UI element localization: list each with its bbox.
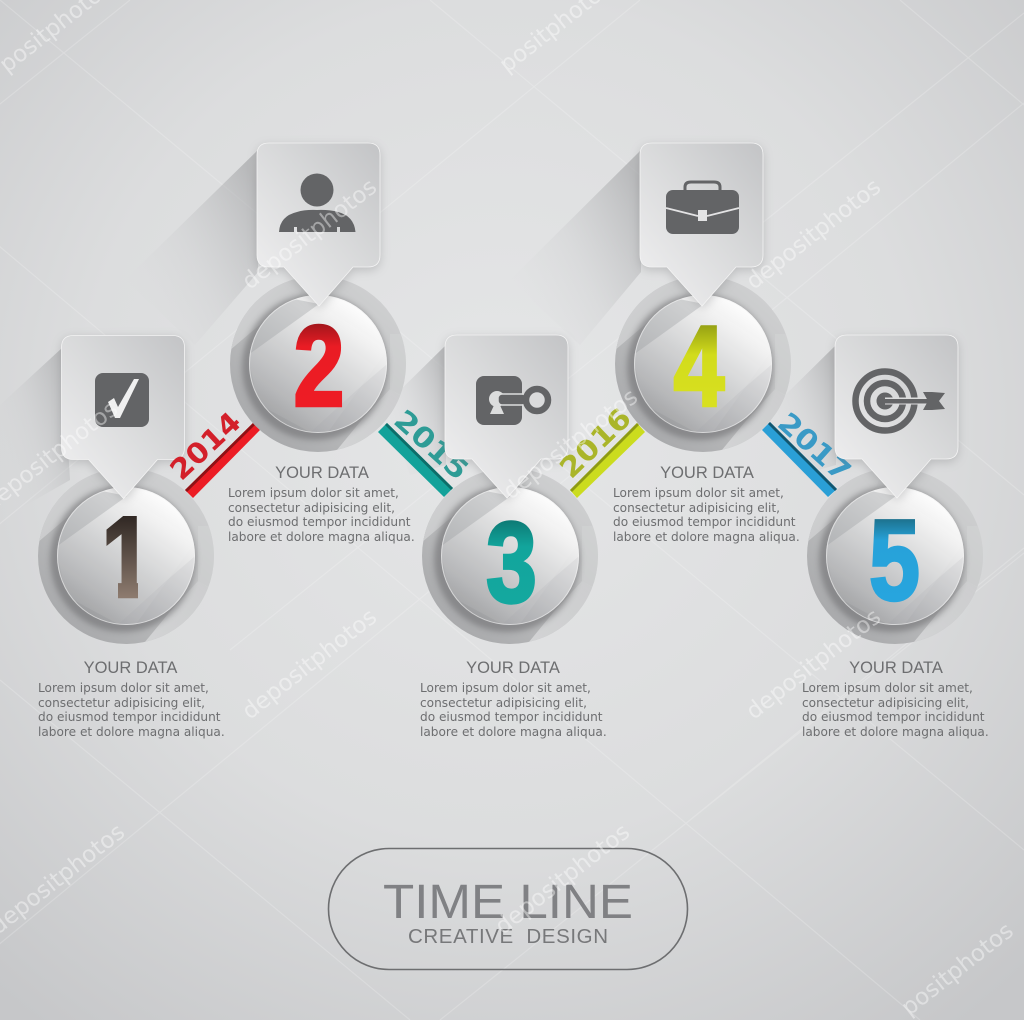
text block 1: do eiusmod tempor incididunt: [38, 710, 221, 724]
tag 3 with key icon: [445, 335, 568, 501]
tag 4 with briefcase icon: [640, 143, 763, 309]
icon: check box: [95, 373, 149, 427]
text block 2: YOUR DATA: [275, 464, 369, 482]
text block 1: labore et dolore magna aliqua.: [38, 725, 225, 739]
watermark: depositphotos: [741, 604, 886, 725]
text block 5: labore et dolore magna aliqua.: [802, 725, 989, 739]
text block 1: Lorem ipsum dolor sit amet,: [38, 681, 209, 695]
year: 2015: 2015: [388, 403, 475, 487]
text block 3: consectetur adipisicing elit,: [420, 696, 587, 710]
icon: person: [279, 174, 356, 232]
text block 3: [420, 659, 607, 739]
text block 3: YOUR DATA: [466, 659, 560, 677]
text block 3: labore et dolore magna aliqua.: [420, 725, 607, 739]
long shadows behind tags: [0, 150, 836, 520]
tag 1 with check icon: [62, 336, 184, 501]
text block 4: do eiusmod tempor incididunt: [613, 515, 796, 529]
number 4: 4: [674, 303, 724, 430]
year: 2016: 2016: [553, 401, 638, 485]
text block 2: Lorem ipsum dolor sit amet,: [228, 486, 399, 500]
text block 1: YOUR DATA: [84, 659, 177, 677]
subtitle: CREATIVE DESIGN: CREATIVE DESIGN: [408, 925, 608, 948]
text block 2: consectetur adipisicing elit,: [228, 501, 395, 515]
sphere 4: [603, 264, 801, 456]
number 5: 5: [869, 497, 920, 624]
text block 4: consectetur adipisicing elit,: [613, 501, 780, 515]
ribbon: 2014: [185, 423, 260, 498]
watermark: depositphotos: [741, 174, 886, 295]
text block 2: [228, 464, 415, 544]
tag 5 with target icon: [835, 335, 958, 501]
icon: key and lock: [476, 376, 548, 425]
text block 4: labore et dolore magna aliqua.: [613, 530, 800, 544]
number 2: 2: [294, 303, 344, 430]
text block 4: YOUR DATA: [660, 464, 754, 482]
text block 5: Lorem ipsum dolor sit amet,: [802, 681, 973, 695]
text block 2: do eiusmod tempor incididunt: [228, 515, 411, 529]
icon: briefcase: [666, 182, 739, 234]
title: TIME LINE: TIME LINE: [383, 876, 633, 929]
title pill: [328, 848, 688, 970]
sphere 3: [410, 456, 608, 648]
watermark: depositphotos: [237, 604, 382, 725]
watermark: depositphotos: [498, 384, 643, 505]
text block 4: Lorem ipsum dolor sit amet,: [613, 486, 784, 500]
ribbon: 2017: [762, 422, 837, 497]
tag 2 with person icon: [257, 143, 380, 309]
year: 2017: 2017: [771, 406, 857, 488]
ribbon: 2015: [378, 423, 453, 497]
text block 3: Lorem ipsum dolor sit amet,: [420, 681, 591, 695]
text block 5: [802, 659, 989, 739]
text block 5: do eiusmod tempor incididunt: [802, 710, 985, 724]
text block 4: [613, 464, 800, 544]
watermark: depositphotos: [490, 819, 635, 940]
number 3: 3: [486, 499, 537, 626]
sphere 2: [218, 264, 416, 456]
ribbon: 2016: [570, 423, 645, 498]
year: 2014: 2014: [164, 405, 247, 487]
icon: target and arrow: [856, 372, 945, 430]
watermark: positphotos: [897, 918, 1019, 1020]
text block 5: consectetur adipisicing elit,: [802, 696, 969, 710]
text block 1: consectetur adipisicing elit,: [38, 696, 205, 710]
text block 3: do eiusmod tempor incididunt: [420, 710, 603, 724]
text block 5: YOUR DATA: [849, 659, 943, 677]
number 1: 1: [102, 494, 152, 621]
sphere 1: [38, 471, 214, 644]
text block 1: [38, 659, 225, 739]
text block 2: labore et dolore magna aliqua.: [228, 530, 415, 544]
watermark: depositphotos: [237, 174, 382, 295]
sphere 5: [795, 456, 993, 648]
